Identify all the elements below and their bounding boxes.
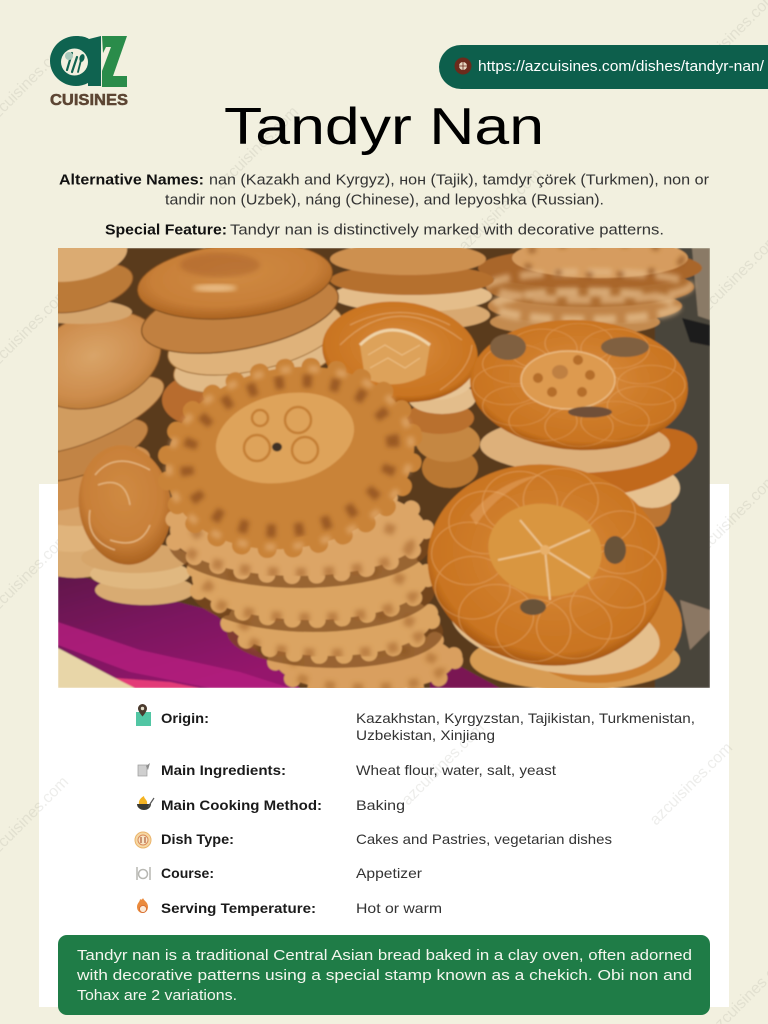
icon: map pin <box>136 704 151 726</box>
row: main ingredients <box>138 762 556 778</box>
twisted bread stack top right <box>477 248 702 332</box>
details table <box>135 704 695 916</box>
special feature: Special Feature: <box>105 222 227 238</box>
row: main ingredients: Main Ingredients: <box>161 762 286 778</box>
second scalloped layer <box>192 536 428 620</box>
alternative names: Alternative Names: <box>59 172 204 188</box>
row: dish type <box>135 831 612 848</box>
url text: https://azcuisines.com/dishes/tandyr-nan/ <box>478 58 765 75</box>
first scalloped layer <box>170 484 426 576</box>
row: course <box>137 865 422 881</box>
icon: plate and cutlery <box>137 867 150 880</box>
magenta cloth <box>58 570 300 688</box>
row: origin: Kazakhstan, Kyrgyzstan, Tajikistan, Turkmenistan, <box>356 710 695 726</box>
crease shadow <box>169 538 430 588</box>
special feature: Tandyr nan is distinctively marked with decorative patterns. <box>230 222 664 238</box>
crease shadow <box>226 624 444 668</box>
icon: globe <box>454 58 472 74</box>
watermarks: azcuisines.com <box>647 739 736 829</box>
alternative names: tandir non (Uzbek), náng (Chinese), and lepyoshka (Russian). <box>165 192 604 208</box>
row: course: Course: <box>161 865 214 881</box>
row: main cooking method <box>137 796 405 813</box>
summary text <box>76 947 692 1004</box>
alternative names: nan (Kazakh and Kyrgyz), нон (Tajik), tamdyr çörek (Turkmen), non or <box>209 172 709 188</box>
watermarks: azcuisines.com <box>399 719 488 809</box>
big scalloped loaf stack <box>151 348 455 692</box>
alternative names <box>59 172 709 208</box>
icon: ladle and flame <box>137 796 154 810</box>
logo plate and cutlery <box>61 48 88 76</box>
row: course: Appetizer <box>356 865 422 881</box>
bottom scalloped layer <box>275 628 455 692</box>
mid patterned loaf stack <box>317 294 483 488</box>
third scalloped layer <box>228 584 432 656</box>
row: main cooking method: Main Cooking Method: <box>161 797 322 813</box>
watermarks: azcuisines.com <box>456 165 545 255</box>
top scalloped crust <box>157 357 422 558</box>
photo: stacks of tandyr nan bread <box>58 248 710 688</box>
title: Tandyr Nan <box>224 98 544 156</box>
crease shadow <box>194 586 434 632</box>
row: origin <box>136 704 695 743</box>
big round patterned loaf stack <box>426 464 684 688</box>
row: serving temperature: Hot or warm <box>356 900 442 916</box>
row: dish type: Dish Type: <box>161 831 234 847</box>
row: main ingredients: Wheat flour, water, salt, yeast <box>356 762 556 778</box>
dark market floor <box>655 248 710 688</box>
summary box <box>58 935 710 1015</box>
small left swirl loaf <box>78 446 192 606</box>
row: serving temperature <box>137 898 442 916</box>
right patterned loaf stack <box>467 314 704 527</box>
logo: AZ Cuisines <box>50 36 128 109</box>
icon: hot flame <box>137 898 148 913</box>
row: main cooking method: Baking <box>356 797 405 813</box>
url pill <box>439 45 768 89</box>
icon: plate <box>135 832 151 848</box>
white content panel <box>39 484 729 1007</box>
logo wordmark: CUISINES <box>50 92 128 109</box>
row: origin: Uzbekistan, Xinjiang <box>356 727 495 743</box>
row: origin: Origin: <box>161 710 209 726</box>
left column stack <box>58 248 165 580</box>
logo letter z <box>102 36 127 87</box>
special feature <box>105 222 664 238</box>
summary text: Tandyr nan is a traditional Central Asian bread baked in a clay oven, often adorned <box>77 947 692 964</box>
watermarks: azcuisines.com <box>213 103 302 193</box>
logo letter a <box>50 36 101 86</box>
middle back stack <box>330 243 494 329</box>
row: serving temperature: Serving Temperature: <box>161 900 316 916</box>
summary text: with decorative patterns using a special stamp known as a chekich. Obi non and <box>76 967 692 984</box>
summary text: Tohax are 2 variations. <box>77 987 237 1004</box>
icon: note <box>138 763 150 776</box>
row: dish type: Cakes and Pastries, vegetarian dishes <box>356 831 612 847</box>
back-left large stack <box>136 248 342 423</box>
